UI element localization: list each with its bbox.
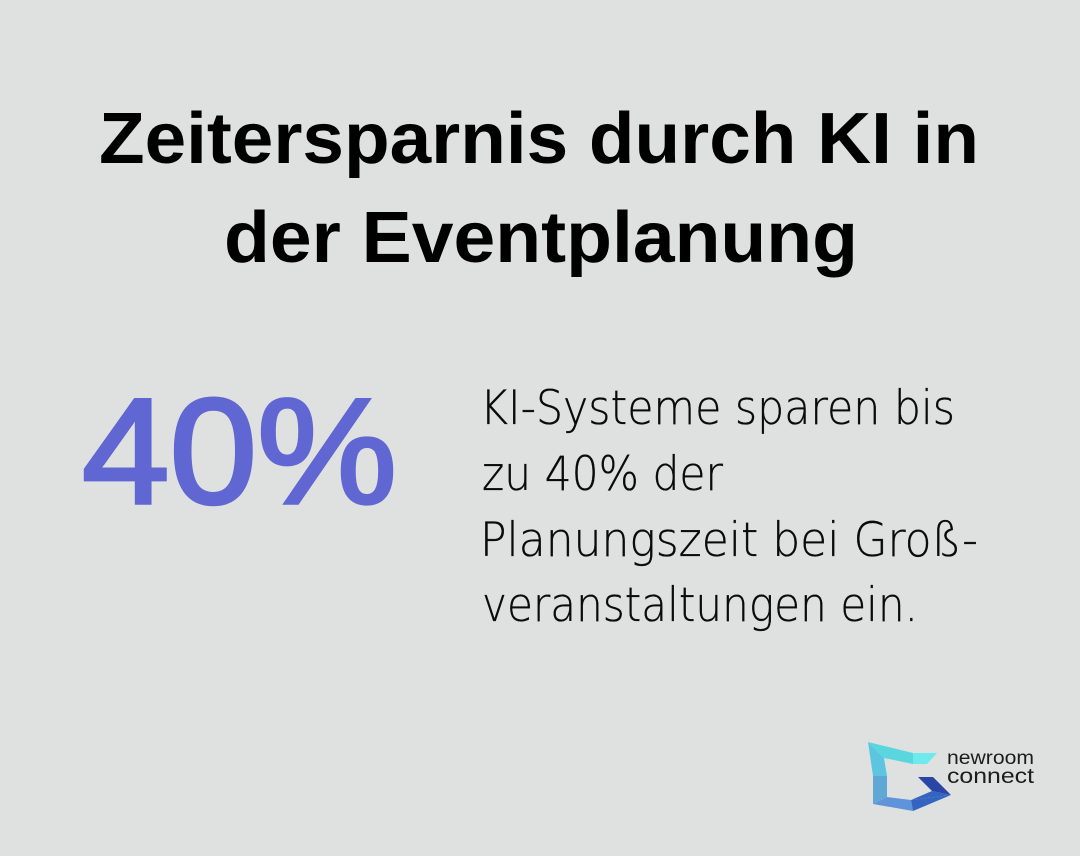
title: Zeitersparnis durch KI in [99, 99, 979, 179]
description text: veranstaltungen ein. [482, 578, 918, 633]
logo: newroom connect [868, 742, 1034, 811]
icon: logo mark [868, 742, 951, 811]
description text: KI-Systeme sparen bis [480, 381, 955, 436]
title: der Eventplanung [224, 198, 858, 278]
big stat: 40%: 40% [82, 367, 397, 535]
logo wordmark: newroom [947, 748, 1034, 769]
description text: Planungszeit bei Groß- [480, 513, 978, 568]
title [99, 99, 979, 278]
description text: zu 40% der [482, 447, 724, 502]
description text [480, 381, 978, 633]
logo wordmark [947, 748, 1034, 788]
logo wordmark: connect [947, 765, 1034, 788]
